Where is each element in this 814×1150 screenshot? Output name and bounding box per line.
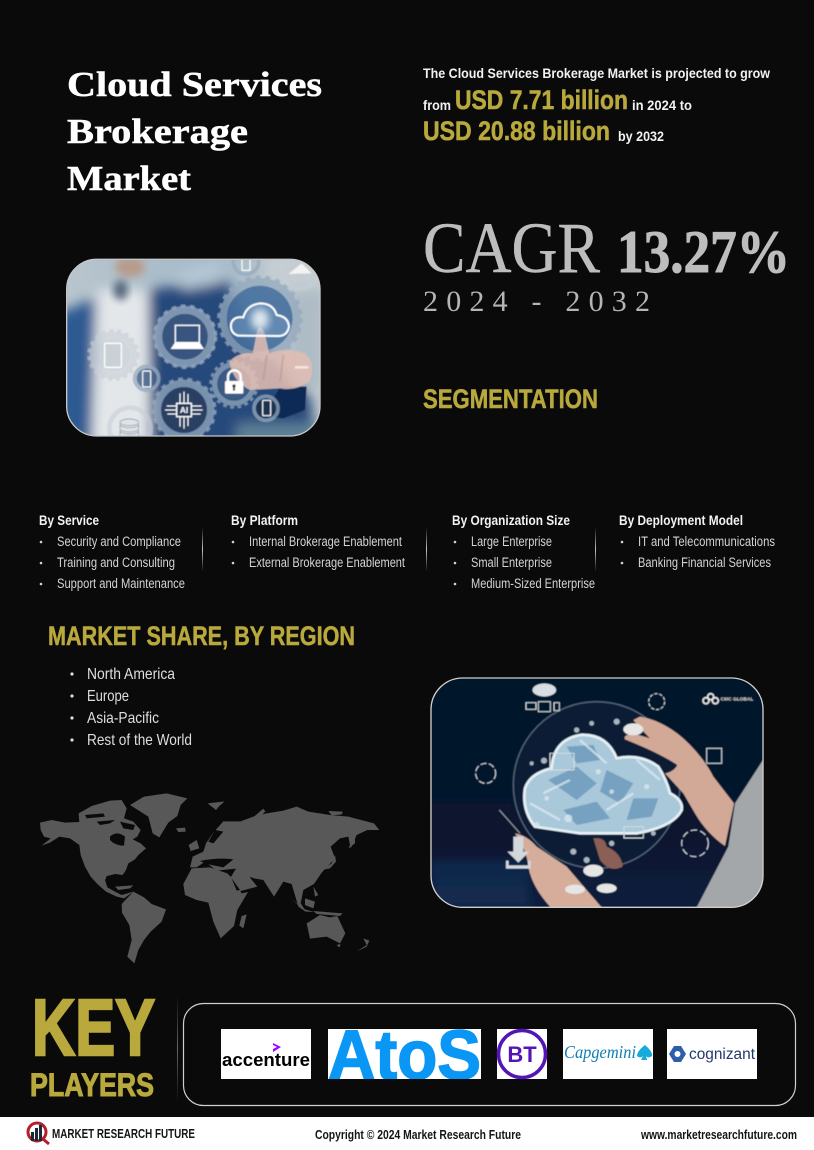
segment: by deployment model: IT and Telecommunications [638,534,775,549]
segment: by organization size: Large Enterprise [471,534,552,549]
logo: BT [497,1029,547,1079]
globe [513,702,680,868]
key players heading [30,983,155,1103]
segment: by deployment model: By Deployment Model [619,512,743,528]
scattered light dots [530,719,656,863]
CAGR figure: CAGR [423,208,600,288]
segmentation heading: SEGMENTATION [423,384,598,414]
footer: MARKET RESEARCH FUTURE [52,1126,195,1141]
CMC Global wordmark: CMC GLOBAL [721,697,753,702]
segment: by service: Support and Maintenance [57,576,185,591]
CMC Global wordmark [703,694,753,704]
title [67,65,322,198]
region list: North America [87,666,175,683]
download icon [506,837,531,869]
segment: by platform: External Brokerage Enablement [249,555,405,570]
sleeve [697,760,763,907]
segment: by platform: Internal Brokerage Enablement [249,534,402,549]
market projection text: The Cloud Services Brokerage Market is projected to grow [423,65,770,81]
logo: cognizant: cognizant [689,1046,756,1063]
segment: by organization size: Medium-Sized Enterprise [471,576,595,591]
AI chip icon: AI [180,405,188,415]
logo: BT: BT [507,1042,537,1067]
photo: glowing cloud between hands [431,678,763,907]
cloud [524,735,682,833]
segment: by organization size: By Organization Size [452,512,570,528]
CAGR figure [423,208,790,318]
logo: Capgemini: Capgemini [564,1042,636,1062]
segment: by deployment model: Banking Financial Services [638,555,771,570]
region list: Asia-Pacific [87,710,159,727]
segment: by service [39,512,185,591]
AI chip icon [165,392,203,429]
footer logo icon [28,1123,49,1144]
segment: by organization size: Small Enterprise [471,555,552,570]
market projection text: from [423,97,451,113]
footer: Copyright © 2024 Market Research Future [315,1127,521,1142]
CAGR figure: 13.27% [617,219,790,285]
gears [86,260,303,436]
cloud icon [231,303,289,336]
segment: by deployment model [619,512,775,570]
title: Brokerage [67,112,248,151]
map cut-outs [85,813,257,891]
photo: cloud gears and businessman [66,258,321,437]
title: Cloud Services [67,65,322,104]
region list: Europe [87,688,129,705]
tablet icon [105,343,121,367]
footer [0,1117,814,1150]
market projection text: USD 20.88 billion [423,116,610,146]
hand [229,327,312,390]
segment: by platform: By Platform [231,512,298,528]
lock icon [225,370,243,394]
region list [70,666,192,749]
logo: Capgemini [563,1029,653,1079]
key players heading: PLAYERS [30,1067,154,1103]
logo: accenture [221,1029,311,1079]
market share heading: MARKET SHARE, BY REGION [48,621,355,651]
market projection text: USD 7.71 billion [455,85,628,115]
segment: by service: Training and Consulting [57,555,175,570]
market projection text [423,65,770,146]
logo: Atos: AtoS [328,1016,481,1094]
hands [625,717,734,846]
segment: by platform [231,512,405,570]
phone icons [143,258,271,416]
title: Market [67,159,191,198]
key players panel [184,1004,796,1106]
logo: cognizant [667,1029,757,1079]
laptop icon [171,325,204,349]
database icon [120,419,139,438]
key players heading: KEY [32,983,155,1072]
logo: Atos [328,1029,481,1079]
region list: Rest of the World [87,732,192,749]
market projection text: by 2032 [618,128,664,144]
segment: by service: By Service [39,512,99,528]
CAGR figure: 2024 - 2032 [423,285,650,318]
icons around [476,684,722,857]
market projection text: in 2024 to [632,97,692,113]
world map [40,793,379,963]
segment: by service: Security and Compliance [57,534,181,549]
segment: by organization size [452,512,595,591]
logo: accenture: accenture [222,1050,310,1070]
